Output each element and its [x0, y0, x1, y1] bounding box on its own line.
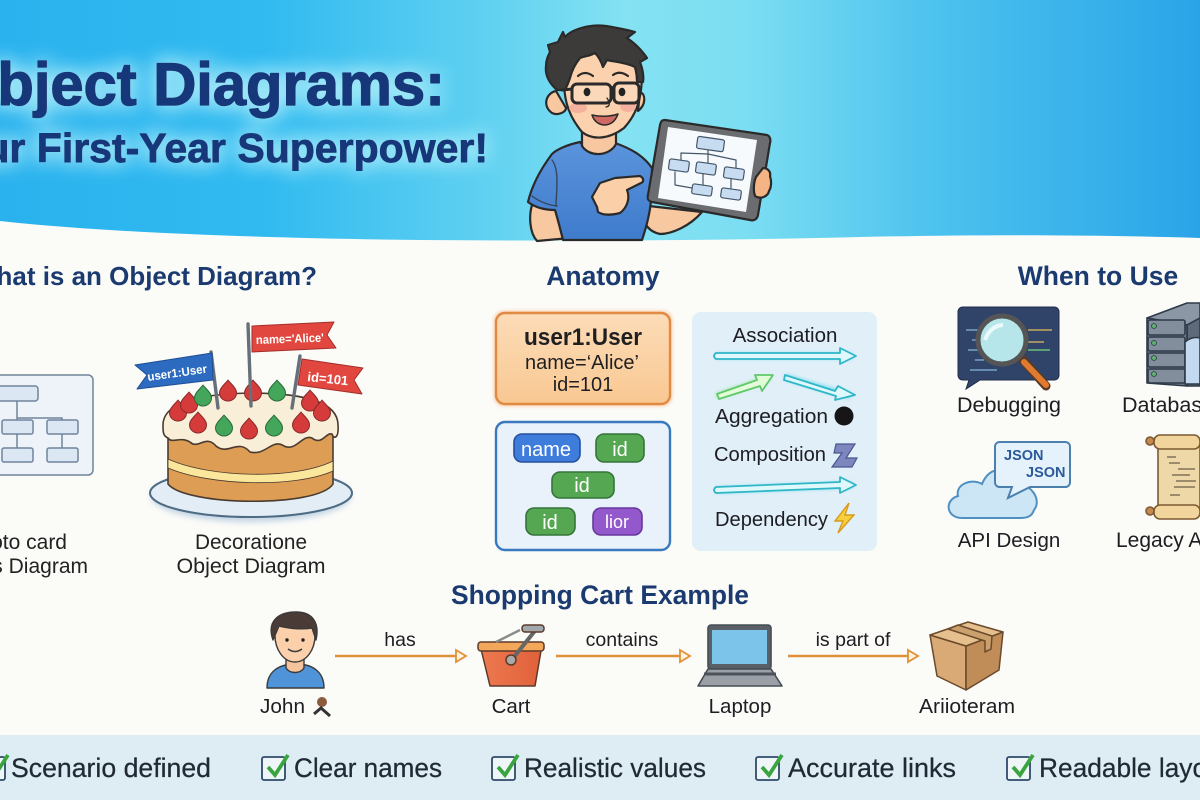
labels: Association [733, 324, 837, 347]
eyes [584, 88, 590, 96]
labels: Aggregation [715, 405, 828, 428]
illustration: student with tablet [528, 26, 771, 241]
flag text: user1:User [146, 362, 208, 384]
candies [170, 380, 330, 439]
chip: name [514, 434, 580, 462]
sleeve hem [532, 160, 557, 206]
icon: black dot [834, 406, 854, 426]
flag: id [298, 359, 363, 394]
section: What is an Object Diagram [0, 261, 363, 578]
card: attribute chips [496, 422, 670, 550]
icon: cloud with JSON bubble [949, 442, 1070, 518]
chip: id [552, 472, 614, 498]
chip: id: id [574, 475, 590, 497]
plate [150, 469, 352, 517]
chip: id: id [542, 512, 558, 534]
chip: id [526, 508, 575, 535]
labels: Composition [714, 443, 826, 466]
icon: cart [478, 625, 544, 686]
plate shadow [151, 470, 351, 522]
card: object box: user1:User [524, 324, 642, 351]
arrow: is part of [788, 629, 918, 662]
flag: name [252, 322, 336, 352]
card: object box: name=‘Alice’ [525, 352, 639, 374]
icon: class diagram card [0, 375, 93, 475]
item: names: Clear names [294, 753, 442, 783]
labels: Dependency [715, 508, 829, 531]
blush [569, 103, 587, 113]
right hand [754, 168, 771, 198]
flag text: name='Alice' [256, 331, 324, 347]
chip: id: id [612, 439, 628, 461]
chip: id [596, 434, 644, 462]
arrow glow [716, 356, 852, 490]
icon: legacy scroll [1146, 435, 1200, 519]
label: cart: Cart [492, 695, 531, 718]
heading: Anatomy [546, 261, 660, 291]
label: John [260, 695, 330, 718]
chip: lior [593, 508, 642, 535]
arrow: has [334, 629, 466, 662]
heading: When to Use [1018, 261, 1178, 291]
panel: relationship legend [692, 312, 877, 551]
icon: lightning [835, 503, 854, 533]
flag text: id=101 [307, 369, 349, 388]
pointing hand [592, 176, 643, 215]
left ear [546, 91, 566, 114]
flag poles [211, 324, 300, 408]
right forearm [640, 205, 702, 234]
icon: decorated cake [135, 322, 363, 522]
chip: lior: lior [605, 512, 629, 532]
section: Anatomy [494, 261, 877, 551]
icon: John [267, 612, 324, 688]
arrow: has: has [384, 629, 416, 651]
title [0, 51, 488, 171]
arrow: is part of: is part of [816, 629, 891, 651]
left arm [530, 200, 600, 241]
header banner [0, 0, 1200, 241]
face [564, 51, 642, 138]
icon: Z shape [832, 444, 857, 467]
icon: box [930, 622, 1003, 690]
card: object box: id=101 [553, 374, 613, 396]
flag: user1:User [135, 353, 213, 389]
label: object diagram [176, 531, 326, 578]
section: Shopping Cart Example [260, 580, 1015, 718]
right ear [638, 92, 644, 111]
icon: cloud with JSON bubble: JSON [1004, 448, 1044, 464]
checklist band [0, 735, 1200, 800]
icing [163, 393, 338, 453]
glasses [562, 83, 639, 103]
item: links: Accurate links [788, 753, 956, 783]
heading: Shopping Cart Example [451, 580, 749, 610]
flag text [146, 331, 349, 388]
hair [546, 26, 647, 90]
card: object box [494, 311, 672, 406]
nose [606, 98, 609, 107]
labels [714, 324, 837, 531]
label: laptop: Laptop [709, 695, 771, 718]
sponge [168, 430, 333, 501]
icon: database [1147, 303, 1200, 386]
icon: debugging [958, 307, 1059, 389]
cream layer [168, 459, 333, 483]
label: object diagram: Decoratione [195, 531, 307, 554]
icon: laptop [698, 625, 782, 686]
section: When to Use [949, 261, 1200, 552]
shirt [528, 142, 652, 240]
icon: cloud with JSON bubble: JSON [1026, 465, 1066, 481]
neck [582, 125, 616, 154]
chip: name: name [521, 439, 571, 461]
arrows [714, 348, 856, 493]
label: debugging: Debugging [957, 393, 1061, 417]
item: values: Realistic values [524, 753, 706, 783]
label: object diagram: Object Diagram [176, 555, 326, 578]
brows [578, 73, 628, 76]
tablet [648, 120, 770, 220]
label: API design: API Design [958, 529, 1060, 552]
label: Ariioteram: Ariioteram [919, 695, 1015, 718]
label: class diagram [0, 531, 88, 578]
mouth [592, 114, 618, 125]
item: scenario: Scenario defined [11, 753, 211, 783]
arrow: contains: contains [586, 629, 659, 651]
arrow: contains [556, 629, 690, 662]
label: John: John [260, 695, 305, 718]
